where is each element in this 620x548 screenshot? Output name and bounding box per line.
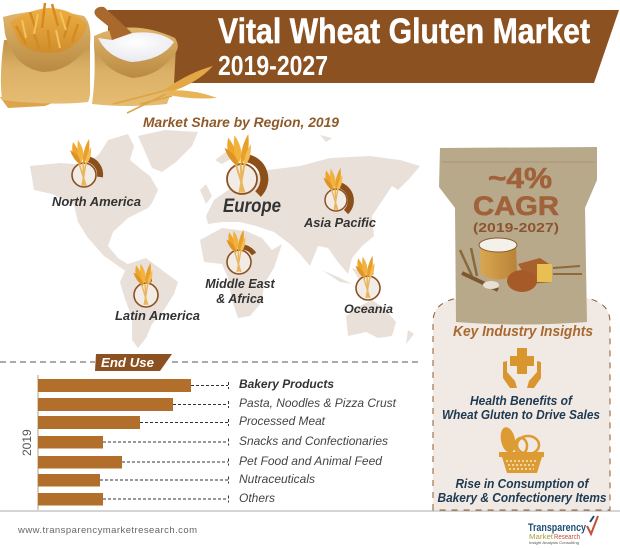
logo: Transparency Market Research: Transparency	[528, 522, 587, 534]
icon: bakery basket	[498, 426, 544, 473]
right sack body	[92, 44, 176, 106]
logo: Transparency Market Research: Market	[529, 534, 553, 541]
scoop	[94, 7, 132, 40]
CAGR value: ~4%	[488, 163, 552, 195]
round bread	[507, 270, 537, 292]
region: Middle East and Africa: & Africa	[216, 292, 264, 306]
axis label: 2019	[20, 429, 34, 456]
panel: key industry insights: Bakery & Confectionery Items	[438, 490, 606, 505]
bar: Pasta, Noodles and Pizza Crust: Pasta, Noodles & Pizza Crust	[239, 396, 397, 410]
bar: Processed Meat	[38, 414, 326, 429]
bar: Nutraceuticals	[38, 472, 315, 486]
logo: Transparency Market Research: Research	[554, 534, 580, 541]
bar: Processed Meat: Processed Meat	[239, 414, 326, 428]
world map	[30, 130, 420, 348]
website url: www.transparencymarketresearch.com	[17, 525, 197, 536]
insight text 1: Health Benefits of	[470, 394, 574, 408]
logo: Transparency Market Research: Insight Analysis Consulting	[529, 541, 579, 545]
right sack lip	[94, 27, 178, 78]
bar chart: end use 2019	[20, 375, 397, 510]
bag body	[439, 147, 597, 324]
illustration: sacks of pasta and flour	[0, 0, 217, 115]
loaf	[518, 258, 552, 284]
region: Latin America: Latin America	[115, 308, 200, 323]
region: North America	[52, 139, 141, 209]
section header: end use	[0, 354, 420, 371]
white backing behind left sack	[0, 0, 108, 110]
panel: key industry insights: Wheat Gluten to Drive Sales	[442, 407, 600, 422]
bar: Snacks and Confectionaries	[38, 434, 388, 448]
region: North America: North America	[52, 194, 141, 209]
region: Europe	[223, 134, 281, 217]
ground shadow	[0, 97, 60, 108]
CAGR bag	[439, 147, 597, 324]
bar: Nutraceuticals: Nutraceuticals	[239, 472, 315, 486]
CAGR label: CAGR	[473, 191, 559, 221]
bar: Bakery Products: Bakery Products	[239, 377, 334, 391]
panel: key industry insights	[433, 297, 610, 510]
bar: Others: Others	[239, 491, 275, 505]
wheat	[460, 248, 477, 276]
bar: Snacks and Confectionaries: Snacks and Confectionaries	[239, 434, 388, 448]
pasta	[10, 8, 87, 53]
insight text 2: Rise in Consumption of	[456, 476, 590, 491]
left sack lip	[3, 11, 90, 72]
bar: Pasta, Noodles and Pizza Crust	[38, 396, 397, 411]
region: Middle East and Africa: Middle East	[205, 277, 276, 291]
banner shape	[108, 10, 619, 83]
white area below banner around right sack	[90, 83, 216, 115]
years: 2019-2027	[218, 50, 328, 81]
bakery illustration	[460, 238, 582, 292]
bar: Pet Food and Animal Feed	[38, 454, 382, 468]
bar: Others	[38, 491, 275, 506]
bar: Bakery Products	[38, 377, 334, 392]
left sack body	[1, 40, 90, 104]
spoon and flour	[462, 273, 498, 290]
title banner	[108, 10, 619, 83]
flour	[98, 32, 174, 62]
footer rule	[0, 510, 620, 512]
flour sack	[480, 245, 517, 280]
region: Middle East and Africa	[205, 230, 276, 306]
region: Oceania: Oceania	[344, 302, 393, 316]
logo: Transparency Market Research	[528, 516, 598, 545]
icon: health cross and hands	[503, 348, 541, 388]
bar: Pet Food and Animal Feed: Pet Food and Animal Feed	[239, 454, 382, 468]
region: Asia Pacific: Asia Pacific	[303, 216, 376, 230]
region: Asia Pacific	[303, 168, 376, 230]
wheat ears	[113, 90, 172, 113]
panel background	[433, 297, 610, 510]
section header: end use: End Use	[101, 355, 154, 370]
heading: market share: Market Share by Region, 2019	[143, 115, 340, 130]
region: Europe: Europe	[223, 196, 281, 217]
axis	[37, 375, 39, 510]
panel heading: Key Industry Insights	[453, 323, 593, 340]
region: Latin America	[115, 263, 200, 323]
CAGR years: (2019-2027)	[473, 220, 559, 235]
region: Oceania	[344, 256, 393, 316]
